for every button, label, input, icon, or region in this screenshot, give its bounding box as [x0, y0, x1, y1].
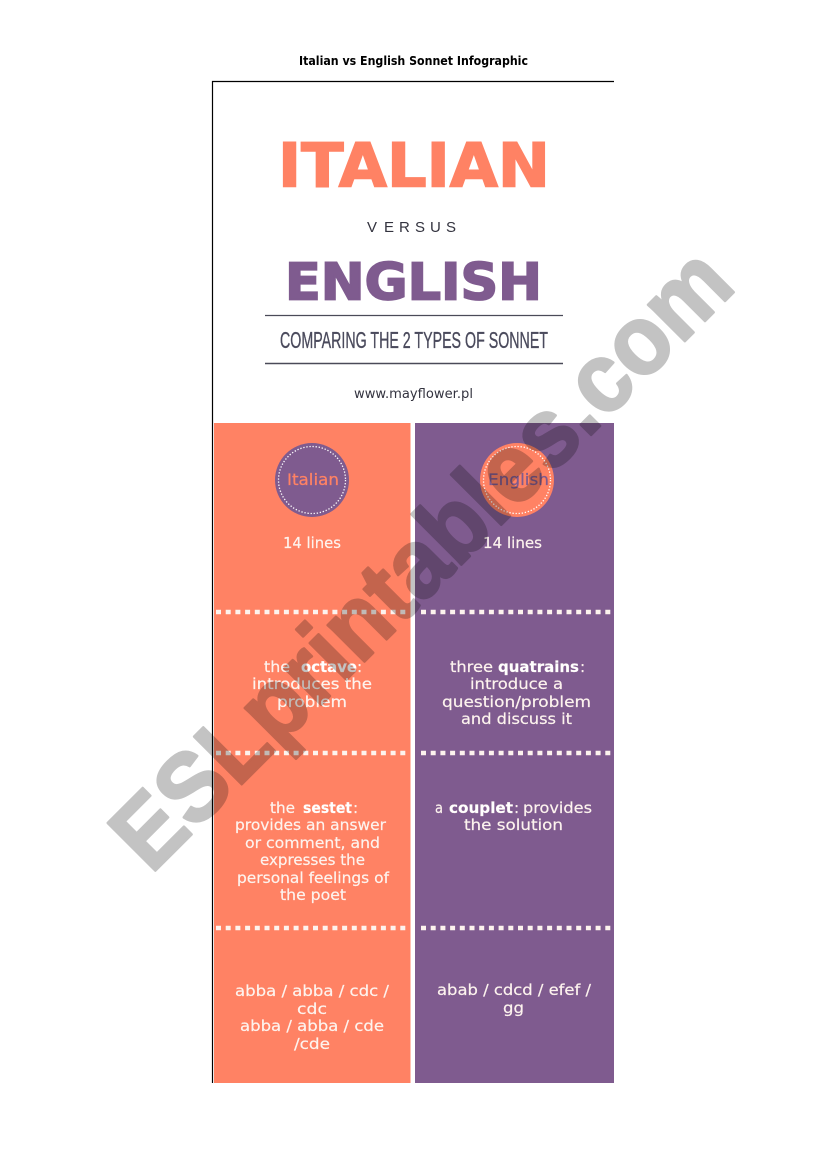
- text: a couplet: :: [514, 799, 519, 817]
- text: the sestet: sestet: [303, 799, 353, 817]
- text: three quatrains: quatrains: [498, 658, 579, 676]
- text: Italian rhyme scheme: abba / abba / cde: [240, 1017, 384, 1035]
- text: the octave: octave: [301, 658, 357, 676]
- text: English rhyme scheme: [437, 981, 592, 1017]
- heading: versus: VERSUS: [367, 219, 456, 236]
- text: three quatrains: question/problem: [442, 693, 591, 711]
- icon: English badge: English: [488, 470, 549, 489]
- heading: ENGLISH: ENGLISH: [285, 254, 542, 312]
- text: Italian line count: 14 lines: [283, 534, 341, 552]
- text: the sestet: expresses the: [260, 851, 365, 869]
- text: the sestet: provides an answer: [235, 816, 387, 834]
- text: the octave: problem: [277, 693, 347, 711]
- text: the sestet: :: [353, 799, 358, 817]
- text: the sestet: the: [270, 799, 295, 817]
- text: the sestet: [235, 799, 390, 904]
- text: the octave: [252, 658, 372, 711]
- text: the octave: introduces the: [252, 675, 372, 693]
- infographic frame: [212, 82, 614, 1083]
- text: English rhyme scheme: gg: [503, 999, 524, 1017]
- text: the sestet: personal feelings of: [237, 869, 390, 887]
- text: Italian rhyme scheme: [235, 982, 390, 1053]
- text: the sestet: or comment, and: [245, 834, 380, 852]
- icon: Italian badge: [275, 443, 349, 517]
- text: a couplet: the solution: [464, 816, 563, 834]
- text: three quatrains: three: [450, 658, 493, 676]
- text: English rhyme scheme: abab / cdcd / efef /: [437, 981, 592, 999]
- text: English line count: 14 lines: [483, 534, 542, 552]
- text: a couplet: couplet: [449, 799, 514, 817]
- icon: Italian badge: Italian: [287, 470, 339, 489]
- text: Italian rhyme scheme: abba / abba / cdc /: [235, 982, 390, 1000]
- text: a couplet: [435, 799, 592, 834]
- text: three quatrains: [442, 658, 591, 728]
- heading: ITALIAN: ITALIAN: [278, 130, 550, 202]
- text: the octave: the: [264, 658, 290, 676]
- text: a couplet: provides: [523, 799, 592, 817]
- icon: English badge: [480, 443, 554, 517]
- watermark: ESLprintables.com: [88, 225, 753, 890]
- panel: Italian column: [214, 423, 410, 1083]
- text: a couplet: a: [435, 799, 443, 817]
- text: Italian rhyme scheme: /cde: [294, 1035, 330, 1053]
- text: the sestet: the poet: [280, 886, 346, 904]
- text: the octave: :: [357, 658, 362, 676]
- subtitle with rules: COMPARING THE 2 TYPES OF SONNET: [280, 327, 548, 353]
- text: Italian rhyme scheme: cdc: [297, 1000, 327, 1018]
- panel: English column: [415, 423, 614, 1083]
- page title: Italian vs English Sonnet Infographic: [299, 54, 528, 68]
- text: three quatrains: introduce a: [470, 675, 563, 693]
- text: three quatrains: and discuss it: [461, 710, 572, 728]
- website: www.mayflower.pl: [354, 387, 473, 402]
- text: three quatrains: :: [580, 658, 585, 676]
